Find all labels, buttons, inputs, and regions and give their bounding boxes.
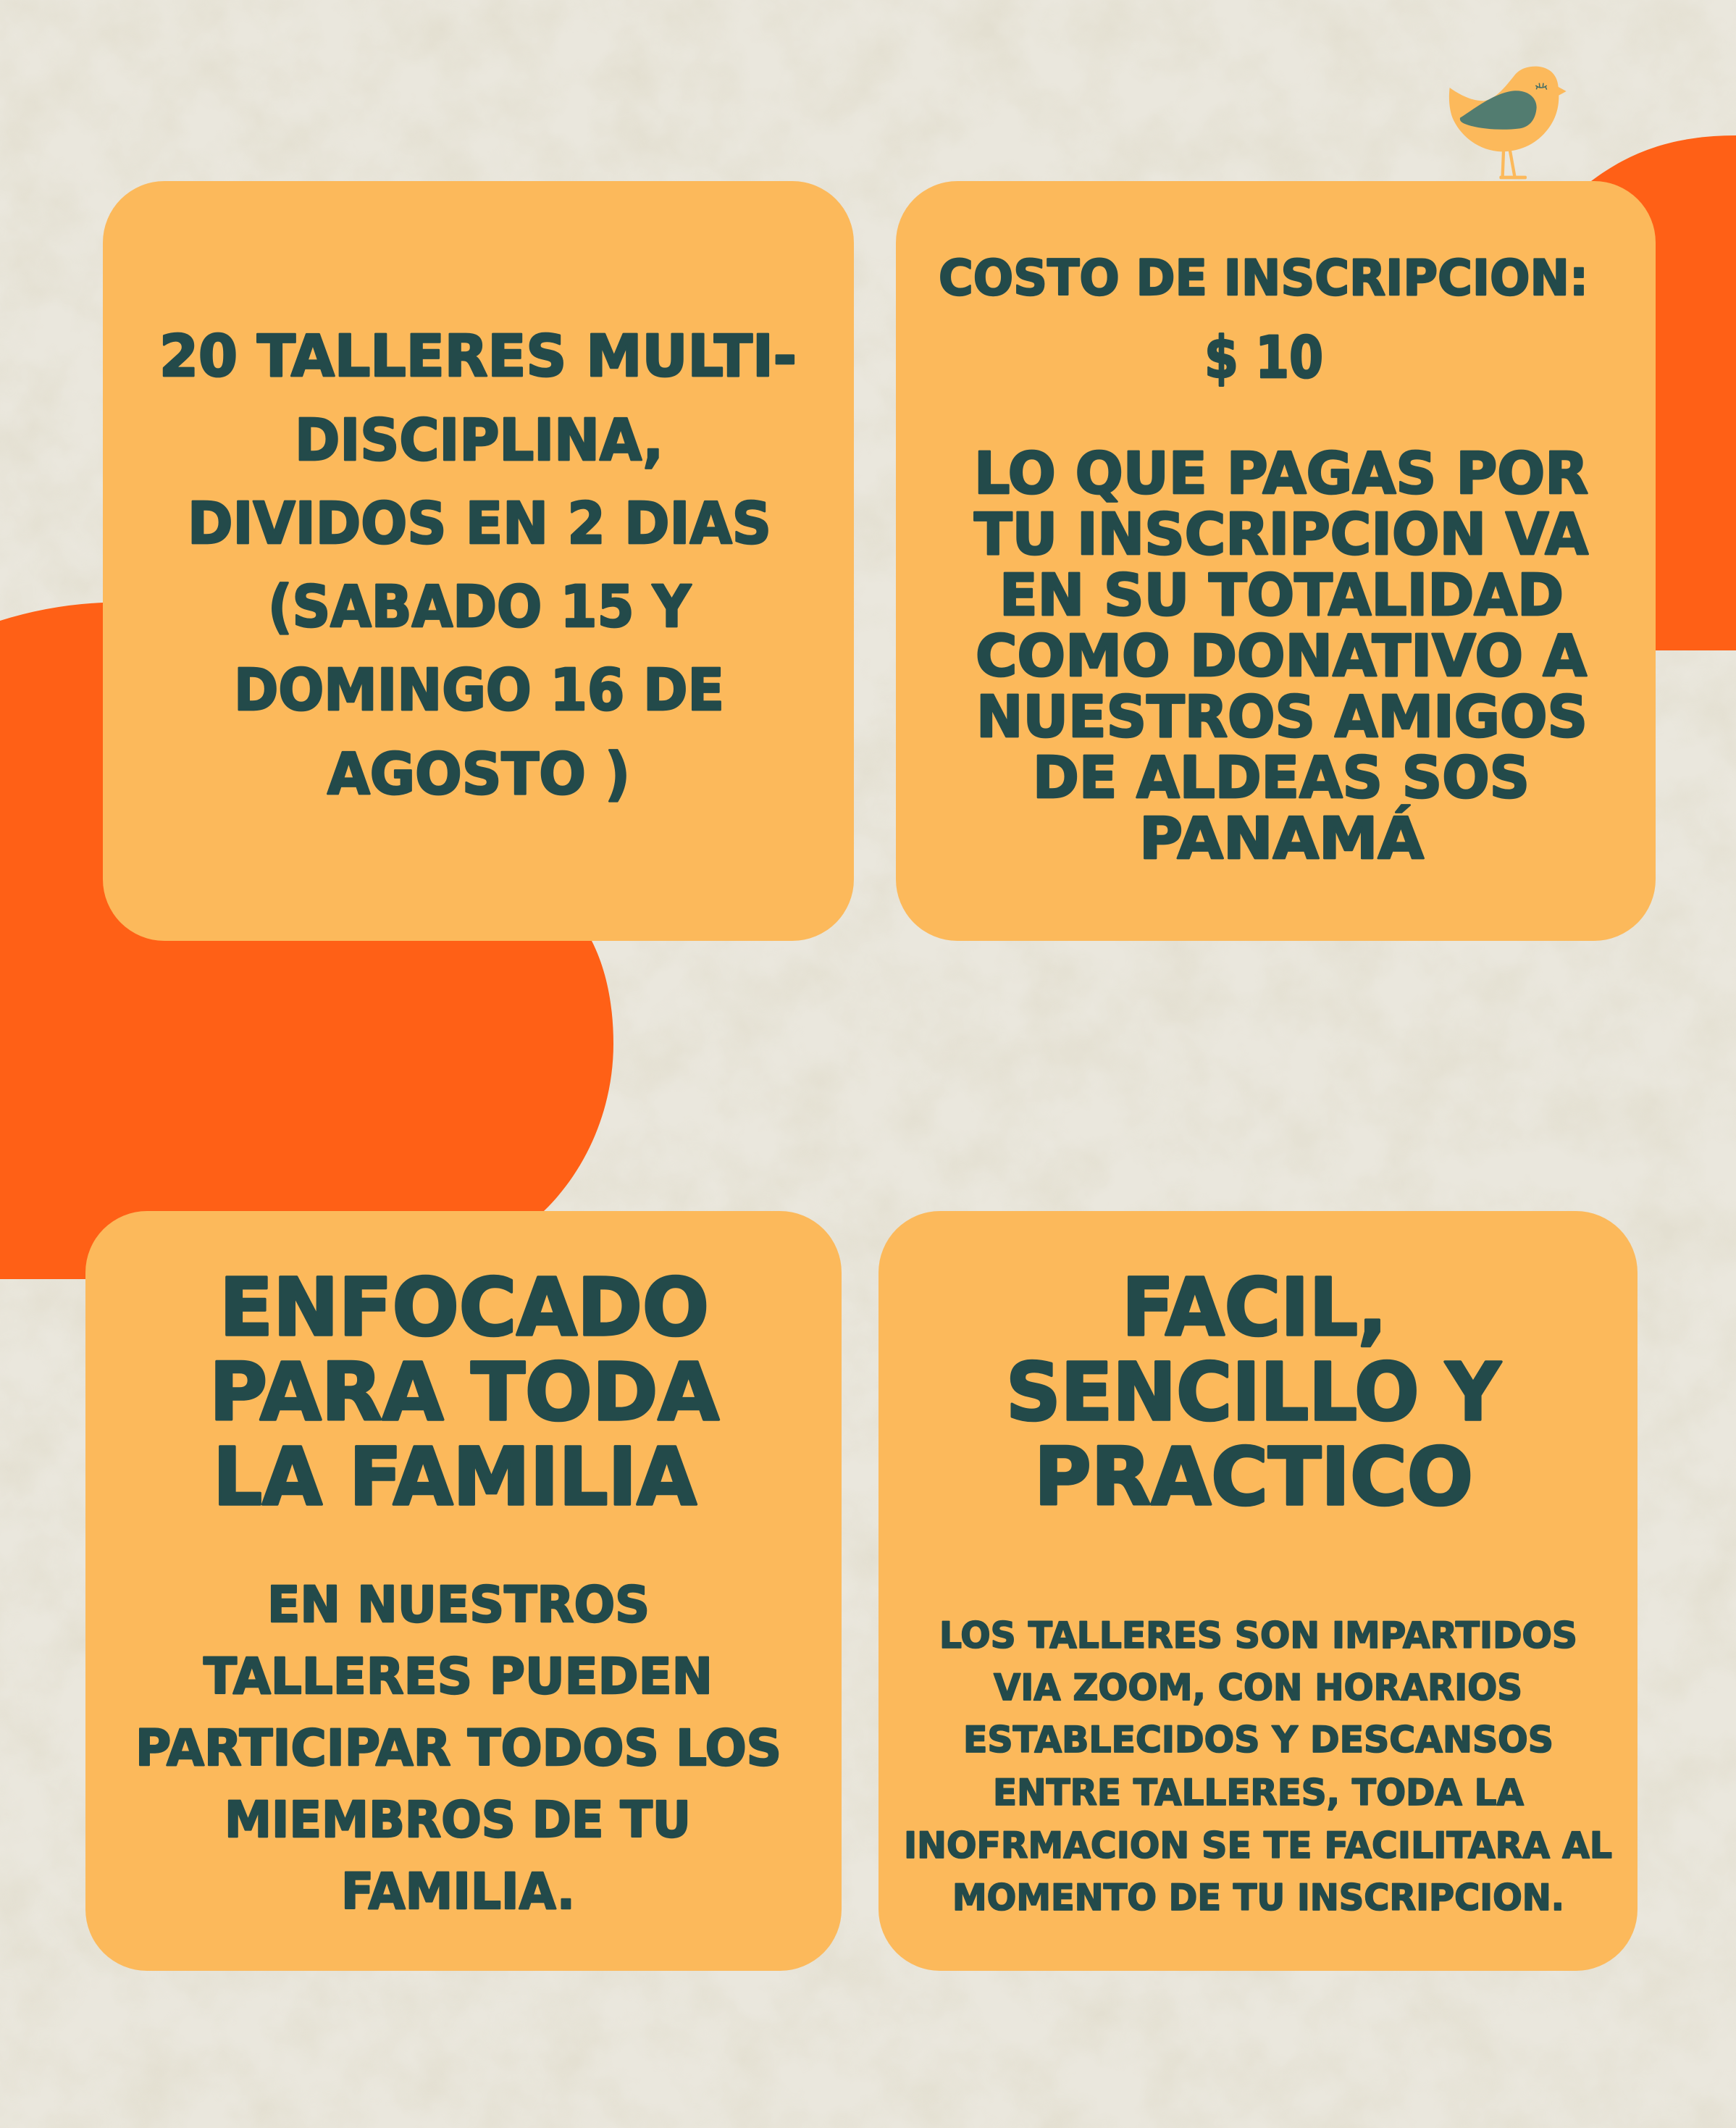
panel: talleres <box>103 181 854 941</box>
text block: familia: TALLERES PUEDEN <box>204 1648 713 1706</box>
card background <box>896 181 1656 941</box>
text block: familia <box>135 1576 781 1921</box>
text block: talleres: DOMINGO 16 DE <box>234 656 724 724</box>
panel: familia <box>85 1211 842 1971</box>
price: $ 10 <box>1204 324 1323 391</box>
text block: familia: MIEMBROS DE TU <box>225 1791 691 1849</box>
heading: enfocado: LA FAMILIA <box>213 1430 697 1523</box>
text block: donativo <box>974 440 1588 872</box>
heading: facil <box>1006 1261 1501 1523</box>
text block: zoom: MOMENTO DE TU INSCRIPCION. <box>952 1877 1564 1919</box>
text block: donativo: DE ALDEAS SOS <box>1033 744 1530 811</box>
text block: zoom: ESTABLECIDOS Y DESCANSOS <box>963 1719 1553 1761</box>
card background <box>103 181 854 941</box>
text block: zoom <box>904 1614 1612 1919</box>
card background <box>879 1211 1638 1971</box>
card background <box>85 1211 842 1971</box>
orange shape: left blob <box>0 603 613 1279</box>
text block: zoom: ENTRE TALLERES, TODA LA <box>993 1772 1524 1814</box>
text block: talleres: (SABADO 15 Y <box>268 573 692 640</box>
text block: talleres: 20 TALLERES MULTI- <box>159 322 797 390</box>
heading: costo: COSTO DE INSCRIPCION: <box>939 250 1588 307</box>
heading: facil: PRACTICO <box>1034 1430 1473 1523</box>
heading: enfocado: ENFOCADO <box>219 1261 709 1354</box>
text block: donativo: TU INSCRIPCION VA <box>974 500 1588 568</box>
text block: donativo: NUESTROS AMIGOS <box>976 683 1588 750</box>
icon: bird <box>1449 67 1567 179</box>
text block: talleres <box>159 322 797 808</box>
text block: familia: EN NUESTROS <box>267 1576 650 1634</box>
heading: enfocado <box>209 1261 719 1523</box>
text block: familia: FAMILIA. <box>341 1863 575 1921</box>
text block: donativo: PANAMÁ <box>1139 804 1424 872</box>
text block: zoom: INOFRMACION SE TE FACILITARA AL <box>904 1825 1612 1867</box>
text block: familia: PARTICIPAR TODOS LOS <box>135 1719 781 1777</box>
panel: facil <box>879 1211 1638 1971</box>
text block: zoom: LOS TALLERES SON IMPARTIDOS <box>939 1614 1577 1656</box>
text block: talleres: AGOSTO ) <box>327 740 630 808</box>
text block: donativo: LO QUE PAGAS POR <box>974 440 1588 507</box>
heading: enfocado: PARA TODA <box>209 1346 719 1438</box>
heading: facil: SENCILLO Y <box>1006 1346 1501 1438</box>
heading: facil: FACIL, <box>1122 1261 1387 1354</box>
text block: donativo: COMO DONATIVO A <box>976 622 1587 690</box>
text block: donativo: EN SU TOTALIDAD <box>999 561 1564 629</box>
text block: zoom: VIA ZOOM, CON HORARIOS <box>994 1667 1522 1709</box>
text block: talleres: DIVIDOS EN 2 DIAS <box>188 490 771 557</box>
panel: costo de inscripcion <box>896 181 1656 941</box>
orange shape: top right blob <box>1591 135 1736 650</box>
text block: talleres: DISCIPLINA, <box>295 406 663 474</box>
